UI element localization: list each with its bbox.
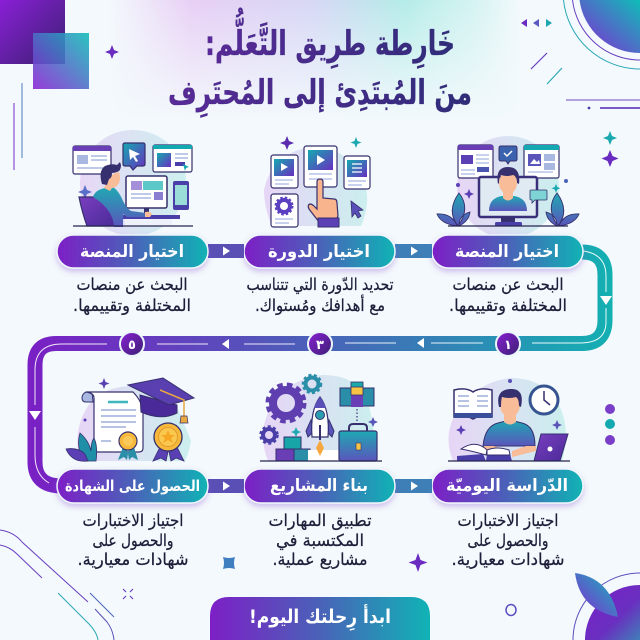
connector arrow: step 2 to 3 — [208, 244, 244, 258]
decoration: top-right circle and rings — [564, 0, 640, 69]
pill: step 6 label — [57, 469, 208, 503]
title: منَ المُبتَدِئ إلى المُحتَرِف — [168, 73, 472, 118]
text: step 3 description: البحث عن منصات — [76, 275, 188, 294]
illustration: building projects — [260, 375, 382, 461]
step badge 1: ١ — [504, 338, 512, 353]
text: step 4 description — [452, 511, 564, 570]
text: step 4 description: شهادات معيارية. — [452, 550, 564, 570]
pill: step 6 label: الحصول على الشهادة — [65, 477, 200, 495]
call to action button: ابدأ رِحلتك اليوم! — [249, 604, 391, 631]
decoration: small arrows top right — [521, 19, 552, 27]
text: step 6 description: اجتياز الاختبارات — [82, 511, 184, 531]
decoration: bottom-right circle and leaf — [573, 573, 640, 640]
illustration: platform choice with person at computer — [73, 130, 193, 236]
illustration: daily study — [448, 378, 570, 461]
text: step 6 description — [78, 511, 188, 570]
text: step 5 description: المكتسبة في — [276, 531, 364, 551]
illustration: platform choice with instructor on screen — [437, 136, 579, 238]
pill: step 4 label — [432, 469, 583, 503]
text: step 6 description: والحصول على — [92, 531, 174, 551]
step badge 3: ٣ — [316, 338, 324, 353]
step badge 1 — [496, 332, 520, 356]
decoration: right sparkles — [602, 131, 618, 167]
decoration: left vertical lines — [14, 83, 22, 170]
decoration: diagonal and horizontal lines top right — [531, 53, 640, 109]
text: step 2 description: مع أهدافك ومُستواك. — [255, 294, 385, 316]
pill: step 3 label: اختيار المنصة — [80, 242, 184, 262]
illustration: certificate — [66, 378, 194, 461]
connector arrow: step 4 to 5 — [395, 479, 432, 493]
step badge 5: ٥ — [128, 338, 136, 353]
pill: step 5 label — [244, 469, 395, 503]
text: step 4 description: اجتياز الاختبارات — [458, 511, 558, 531]
text: step 5 description: مشاريع عملية. — [272, 550, 368, 570]
connector arrow: step 5 to 6 — [208, 479, 244, 493]
pill: step 1 label: اختيار المنصة — [455, 242, 559, 262]
text: step 3 description — [73, 275, 191, 316]
text: step 5 description: تطبيق المهارات — [268, 511, 372, 531]
text: step 2 description — [246, 275, 394, 316]
pill: step 2 label — [244, 235, 395, 268]
text: step 5 description — [268, 511, 372, 570]
text: step 4 description: والحصول على — [468, 531, 548, 551]
title: خَارِطة طرِيق التَّعَلُّم: — [205, 8, 455, 69]
decoration: top-left sparkle — [105, 45, 119, 59]
step badge 5 — [120, 332, 144, 356]
text: step 6 description: شهادات معيارية. — [78, 550, 188, 570]
path arrows — [29, 296, 612, 420]
call to action button — [210, 597, 430, 640]
decoration: bottom-left curved lines — [0, 530, 114, 640]
connector arrow: step 1 to 2 — [395, 244, 432, 258]
pill: step 1 label — [432, 235, 583, 268]
title — [168, 8, 472, 118]
decoration: right dots — [605, 404, 615, 445]
text: step 1 description — [449, 275, 567, 316]
step badge 3 — [308, 332, 332, 356]
title glow — [110, 0, 520, 120]
pill: step 2 label: اختيار الدورة — [268, 242, 370, 262]
text: step 1 description: المختلفة وتقييمها. — [449, 296, 567, 316]
decoration: bottom sparkles — [123, 553, 516, 616]
illustration: course choice with pointing hand — [264, 136, 370, 227]
text: step 2 description: تحديد الدّورة التي تتناسب — [246, 275, 394, 295]
text: step 3 description: المختلفة وتقييمها. — [73, 296, 191, 316]
pill: step 4 label: الدّراسة اليوميّة — [446, 476, 568, 496]
decoration: top-left squares — [0, 0, 89, 89]
roadmap path — [29, 251, 612, 486]
pill: step 5 label: بناء المشاريع — [270, 476, 368, 496]
pill: step 3 label — [57, 235, 208, 268]
text: step 1 description: البحث عن منصات — [452, 275, 564, 294]
